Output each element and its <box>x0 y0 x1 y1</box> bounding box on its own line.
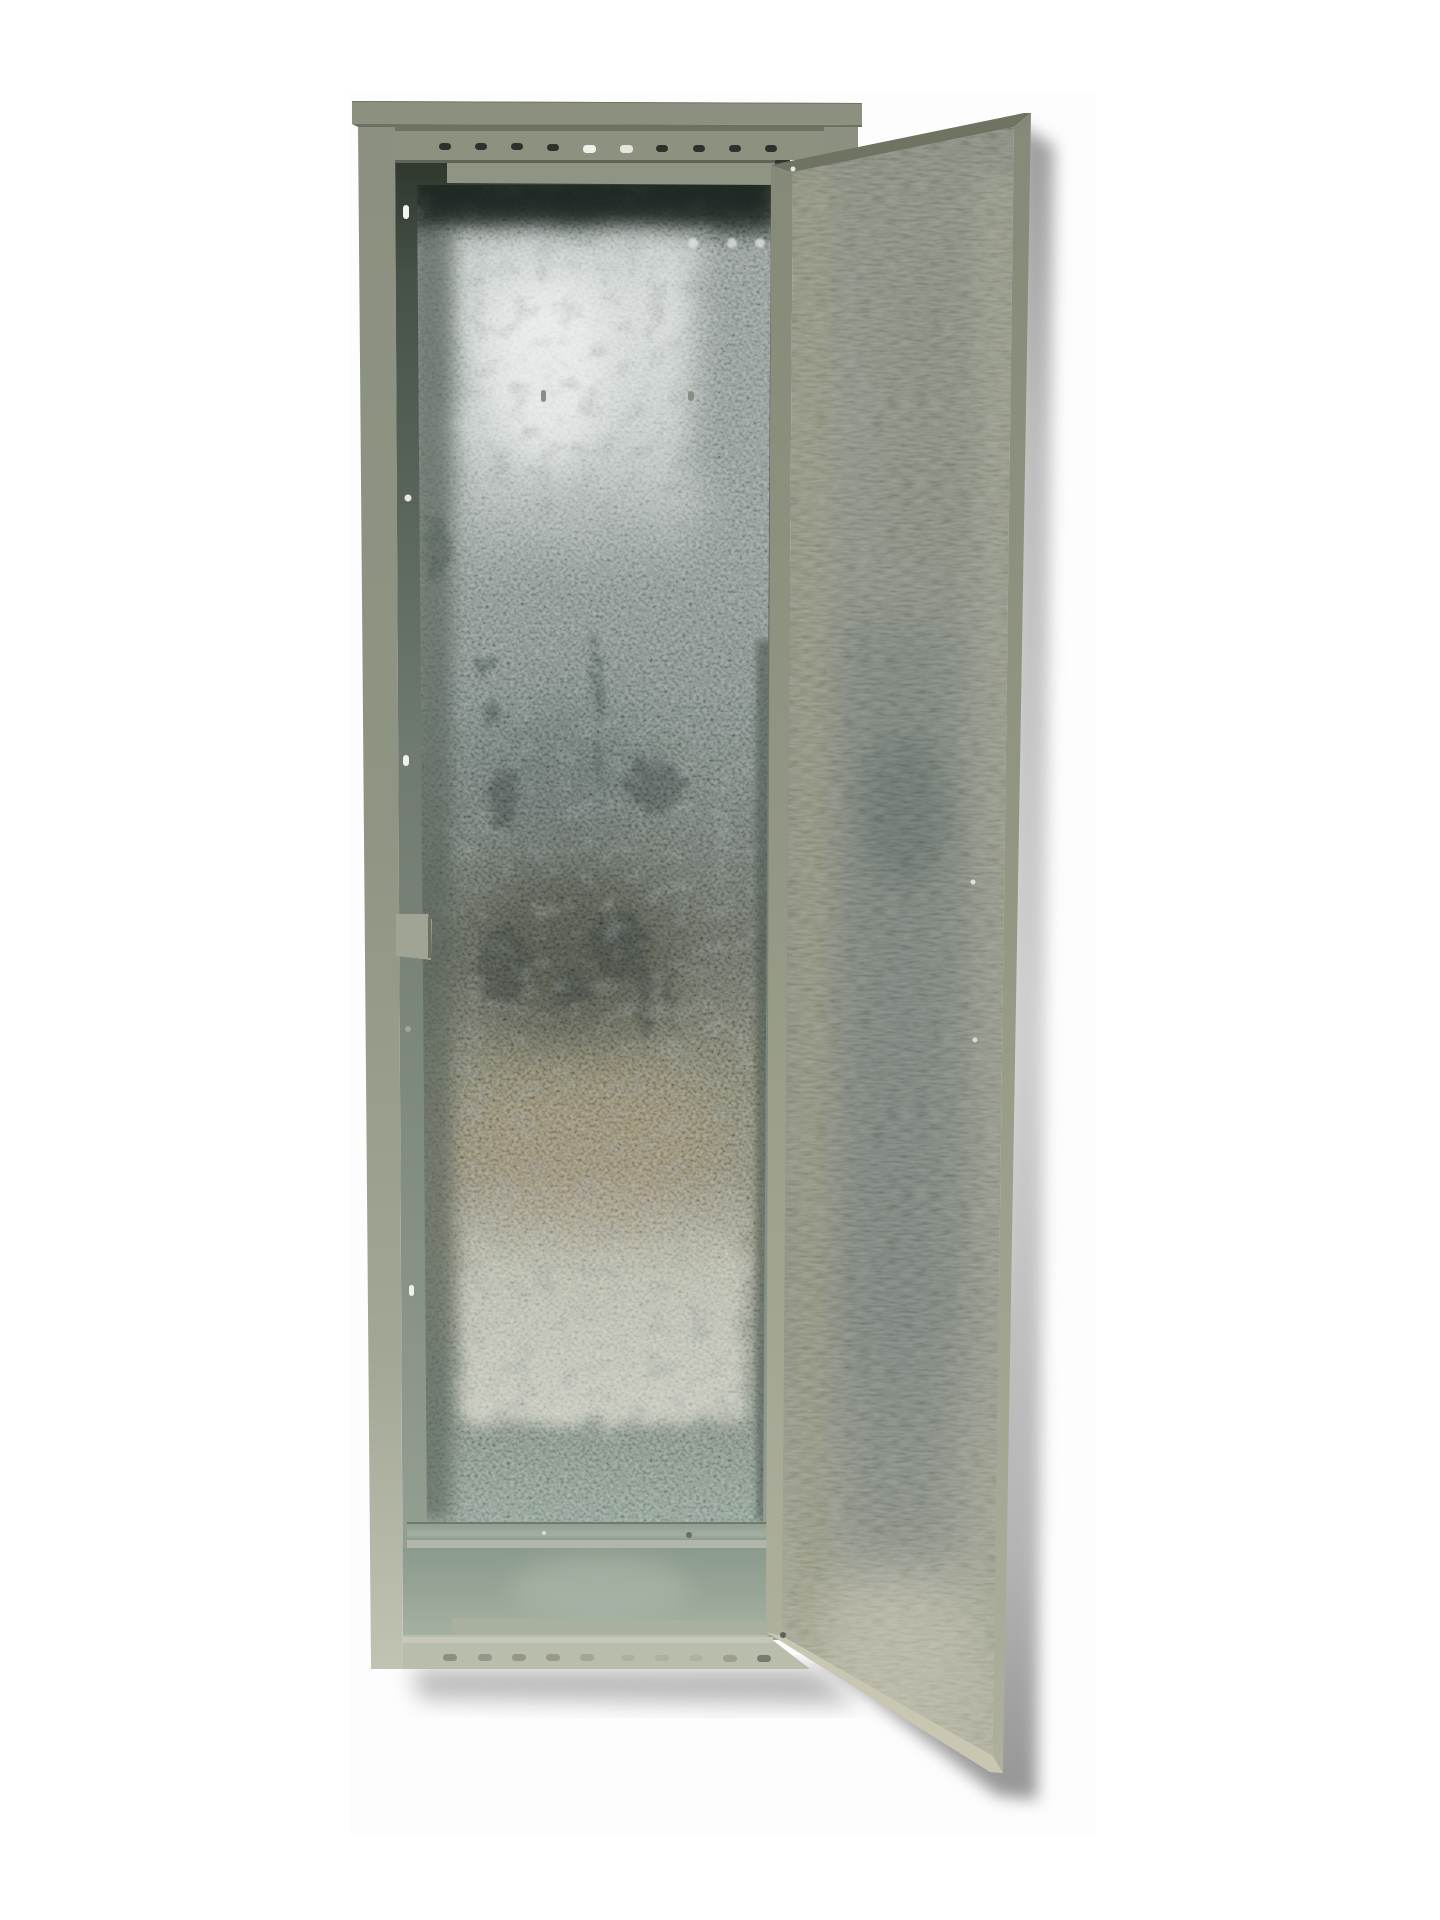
cabinet body <box>352 101 862 1669</box>
lower bright reflection <box>460 1170 746 1424</box>
panel holes <box>541 390 546 402</box>
door hinge pins <box>780 1632 786 1638</box>
door bottom flange <box>766 1632 1003 1773</box>
background plate <box>350 92 1095 1834</box>
illustration: open galvanised metal cabinet <box>352 101 1066 1810</box>
top inner lip <box>447 162 775 185</box>
dark streaks and patches <box>423 518 685 1038</box>
latch tab <box>396 914 432 960</box>
wall holes <box>403 205 414 1296</box>
dark weathering <box>460 865 680 1045</box>
dark edge shading <box>412 230 452 1520</box>
top rail slots <box>439 143 777 153</box>
bottom shelf bracket <box>407 1523 770 1540</box>
open door <box>766 110 1031 1790</box>
door face <box>782 127 1014 1756</box>
shadow beside door <box>820 125 1054 1800</box>
top rail <box>395 127 824 160</box>
shadow under cabinet <box>412 1669 860 1704</box>
interior underlay wall <box>395 160 790 1640</box>
bottom rail <box>403 1635 810 1669</box>
cabinet floor <box>403 1548 770 1635</box>
roof <box>352 101 862 125</box>
rust tint <box>450 1060 730 1230</box>
back panel <box>412 175 774 1523</box>
door top flange <box>771 113 1031 172</box>
left body face <box>358 125 403 1669</box>
shadow cast by top lip <box>417 175 771 223</box>
floor lip <box>452 1618 770 1636</box>
right body stub behind door <box>824 127 858 172</box>
upper bright reflection <box>455 225 695 575</box>
bottom rail slots <box>443 1654 771 1662</box>
door left flange <box>766 165 793 1636</box>
door right flange <box>993 113 1031 1773</box>
top glints <box>688 238 698 248</box>
